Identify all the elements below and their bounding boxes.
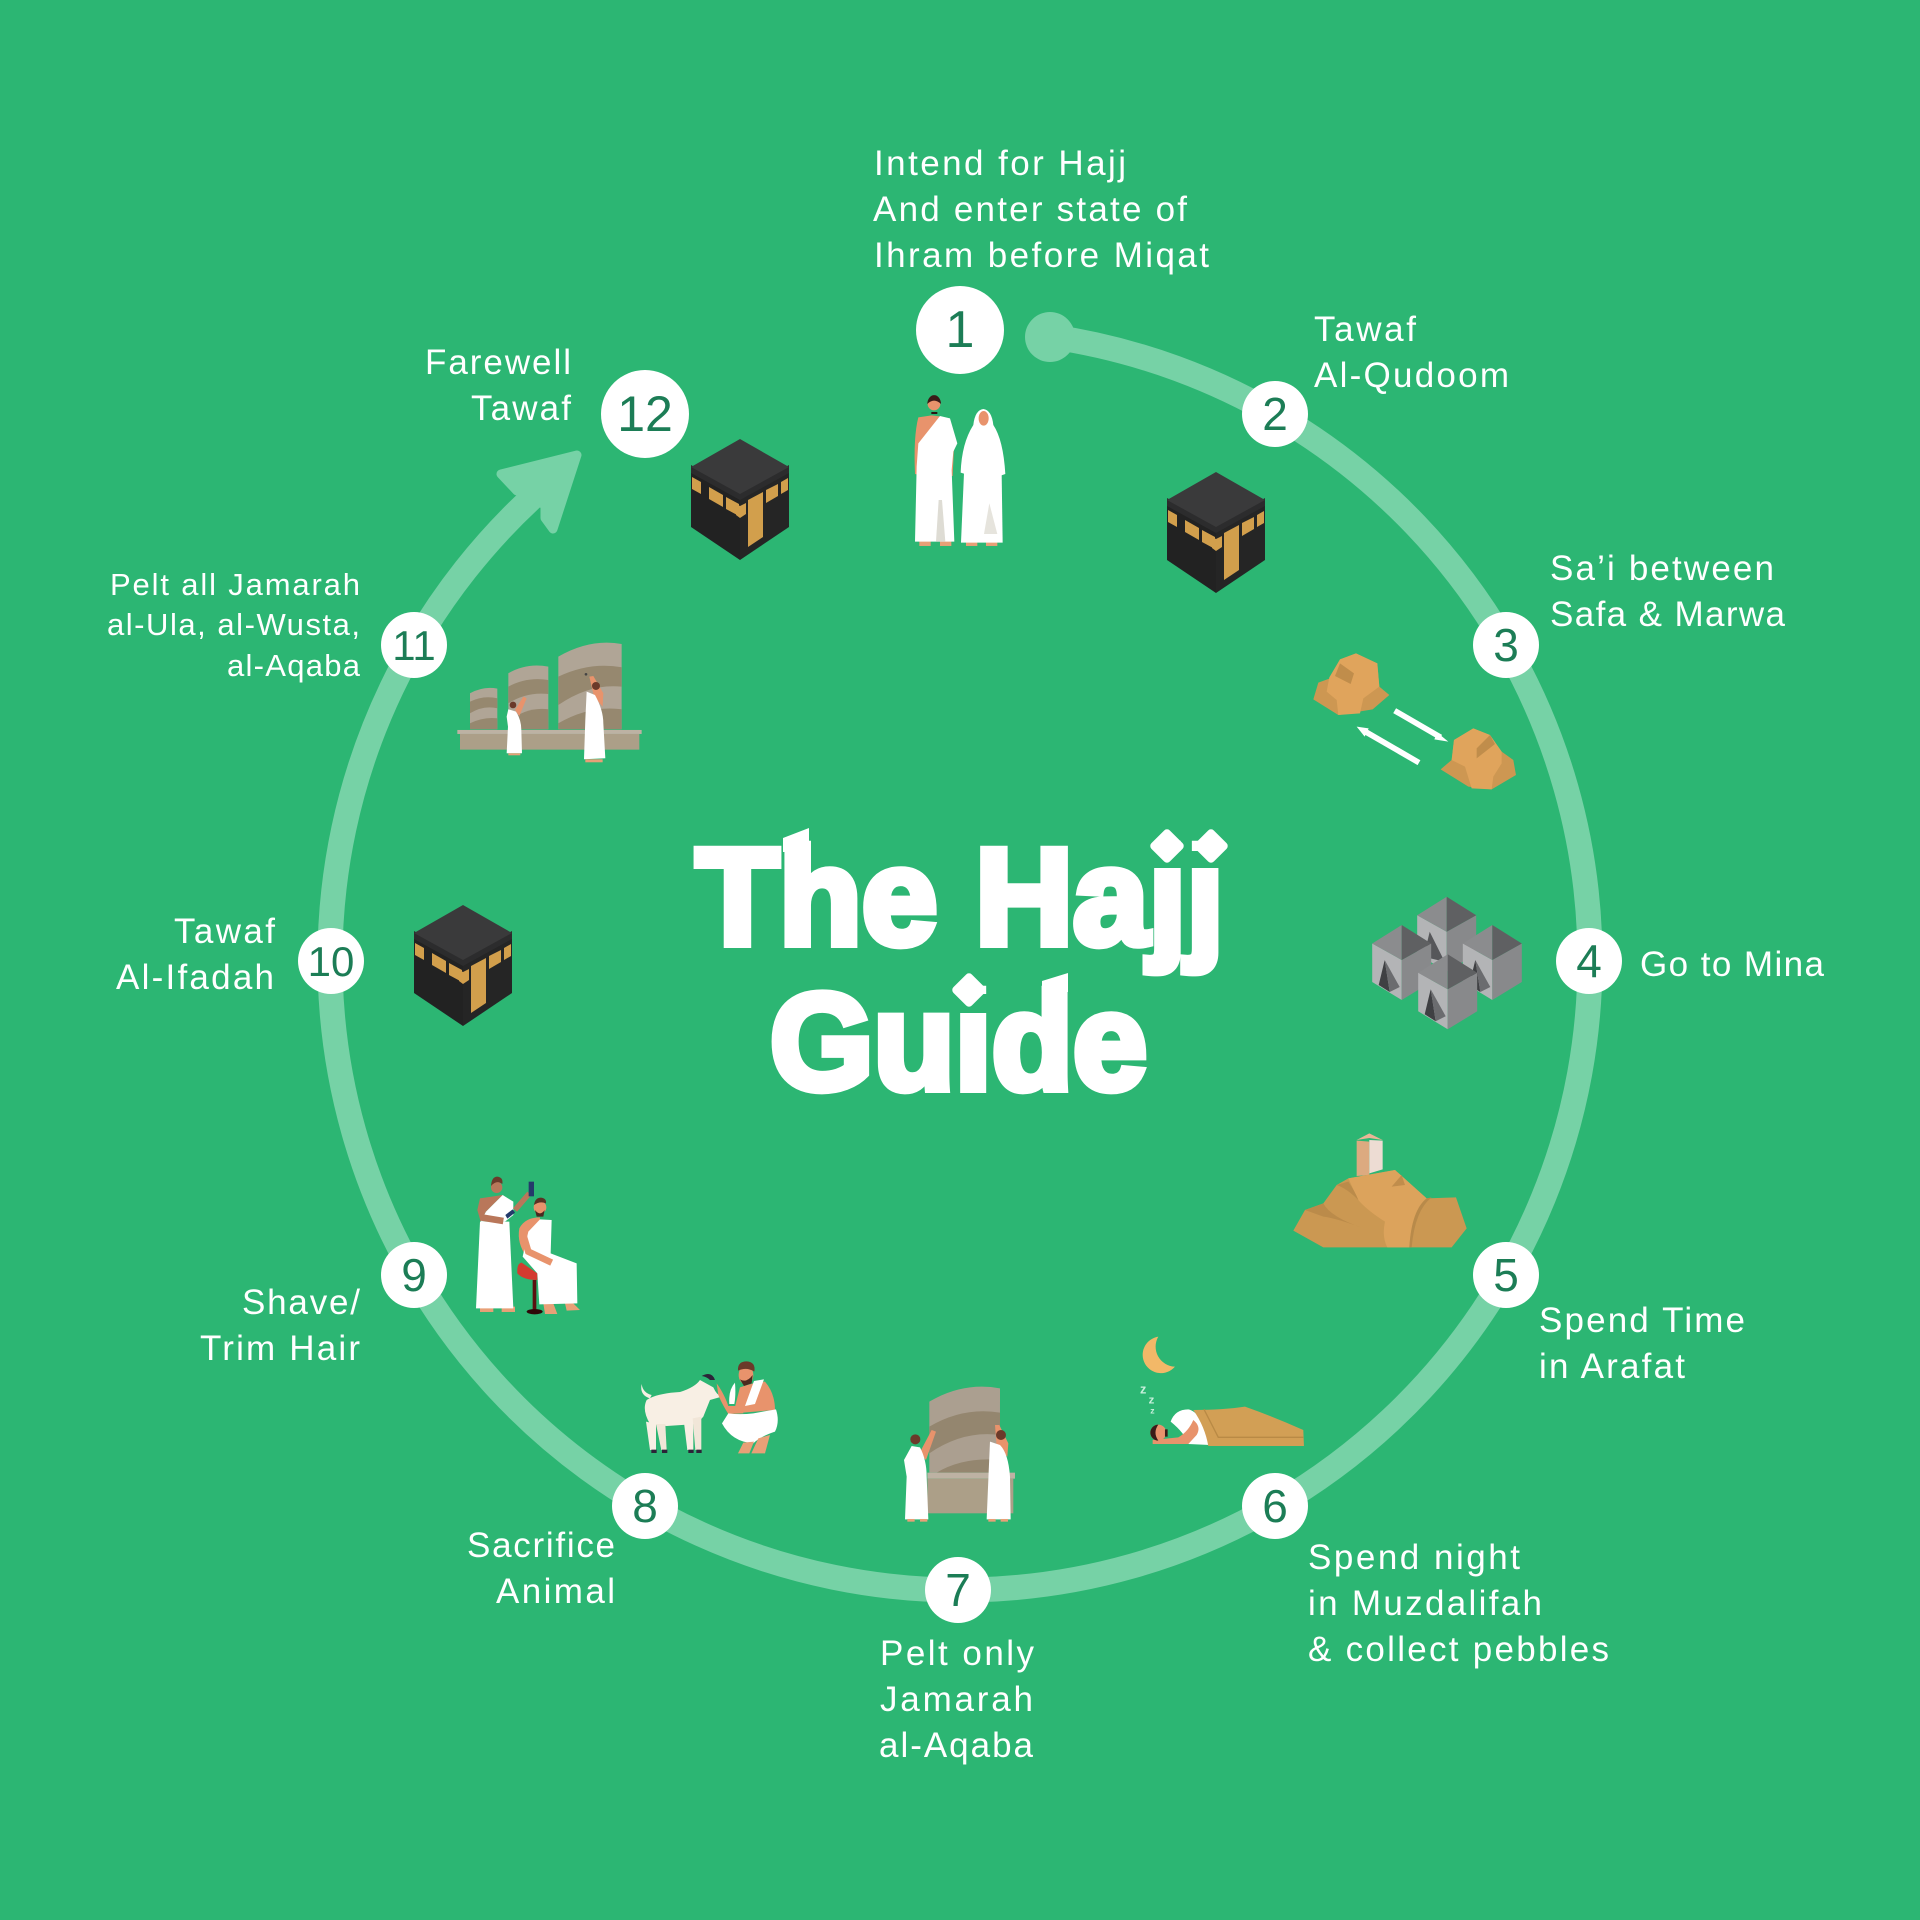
icon: Kaaba, step 2 [1167, 472, 1265, 593]
step 11 number: 11 [392, 622, 436, 669]
label step 3: Sa’i between [1550, 549, 1774, 588]
label step 6 [1308, 1538, 1609, 1669]
step 1 number [916, 286, 1004, 374]
step 8 number [612, 1473, 678, 1539]
icon: Kaaba, step 10 [414, 905, 512, 1026]
label step 2 [1314, 310, 1509, 395]
label step 1: Ihram before Miqat [874, 236, 1209, 275]
step 6 number [1242, 1473, 1308, 1539]
label step 7 [879, 1634, 1034, 1765]
label step 12: Tawaf [471, 389, 571, 428]
icon: sleeping pilgrim under moon: z [1150, 1405, 1155, 1415]
label step 7: Pelt only [880, 1634, 1034, 1673]
label step 6: & collect pebbles [1308, 1630, 1609, 1669]
icon: sleeping pilgrim under moon: z [1149, 1394, 1155, 1406]
tent right [1463, 925, 1522, 1000]
step 6 number: 6 [1262, 1480, 1288, 1532]
step 9 number: 9 [401, 1249, 427, 1301]
step 10 number: 10 [308, 938, 354, 985]
step 12 number: 12 [617, 386, 673, 442]
label step 8: Sacrifice [467, 1526, 615, 1565]
label step 5 [1539, 1301, 1745, 1386]
icon: Mount Arafat with pillar [1293, 1133, 1467, 1247]
icon: pilgrim with goat [641, 1361, 778, 1453]
icon: Kaaba, step 12 [691, 439, 789, 560]
label step 8: Animal [496, 1572, 615, 1611]
circular path arrow [330, 312, 1590, 1590]
label step 4: Go to Mina [1640, 945, 1825, 984]
title [696, 821, 1235, 1119]
label step 7: Jamarah [880, 1680, 1033, 1719]
label step 6: Spend night [1308, 1538, 1520, 1577]
label step 10: Al-Ifadah [116, 958, 274, 997]
step 5 number: 5 [1493, 1249, 1519, 1301]
step 11 number [381, 612, 447, 678]
tent left [1372, 925, 1431, 1000]
step 4 number: 4 [1576, 935, 1602, 987]
step 7 number [925, 1557, 991, 1623]
label step 11: al-Ula, al-Wusta, [107, 607, 360, 642]
label step 1 [873, 144, 1209, 275]
label step 2: Tawaf [1314, 310, 1416, 349]
label step 12 [425, 343, 571, 428]
icon: sleeping pilgrim under moon [1140, 1337, 1304, 1446]
step 2 number [1242, 381, 1308, 447]
step 10 number [298, 928, 364, 994]
label step 1: Intend for Hajj [874, 144, 1126, 183]
label step 5: in Arafat [1539, 1347, 1685, 1386]
label step 10: Tawaf [174, 912, 275, 951]
label step 1: And enter state of [873, 190, 1187, 229]
icon: pelting single Jamarah [904, 1387, 1015, 1522]
step 9 number [381, 1242, 447, 1308]
label step 3: Safa & Marwa [1550, 595, 1786, 634]
label step 11 [107, 567, 361, 683]
icon: pelting three Jamarat [457, 643, 642, 762]
label step 7: al-Aqaba [879, 1726, 1034, 1765]
label step 9 [200, 1283, 360, 1368]
label step 5: Spend Time [1539, 1301, 1745, 1340]
label step 11: al-Aqaba [227, 648, 361, 683]
icon: hair shaving pilgrims [476, 1177, 580, 1314]
step 12 number [601, 370, 689, 458]
label step 8 [467, 1526, 615, 1611]
icon: Safa and Marwa rocks with arrows [1313, 653, 1516, 789]
label step 3 [1550, 549, 1786, 634]
step 4 number [1556, 928, 1622, 994]
label step 6: in Muzdalifah [1308, 1584, 1542, 1623]
label step 9: Trim Hair [200, 1329, 360, 1368]
title: The Hajj [696, 821, 1224, 974]
tent front [1418, 954, 1477, 1029]
step 8 number: 8 [632, 1480, 658, 1532]
step 3 number: 3 [1493, 619, 1519, 671]
label step 11: Pelt all Jamarah [110, 567, 360, 602]
label step 2: Al-Qudoom [1314, 356, 1509, 395]
label step 10 [116, 912, 275, 997]
step 7 number: 7 [945, 1564, 971, 1616]
label step 12: Farewell [425, 343, 571, 382]
step 1 number: 1 [946, 301, 974, 359]
icon: Mina tents [1372, 897, 1522, 1029]
icon: sleeping pilgrim under moon: z [1140, 1382, 1146, 1396]
step 3 number [1473, 612, 1539, 678]
icon: pilgrims in ihram [915, 395, 1005, 546]
step 2 number: 2 [1262, 388, 1288, 440]
label step 9: Shave/ [242, 1283, 360, 1322]
tent back [1417, 897, 1476, 972]
step 5 number [1473, 1242, 1539, 1308]
title: Guide [770, 966, 1147, 1119]
